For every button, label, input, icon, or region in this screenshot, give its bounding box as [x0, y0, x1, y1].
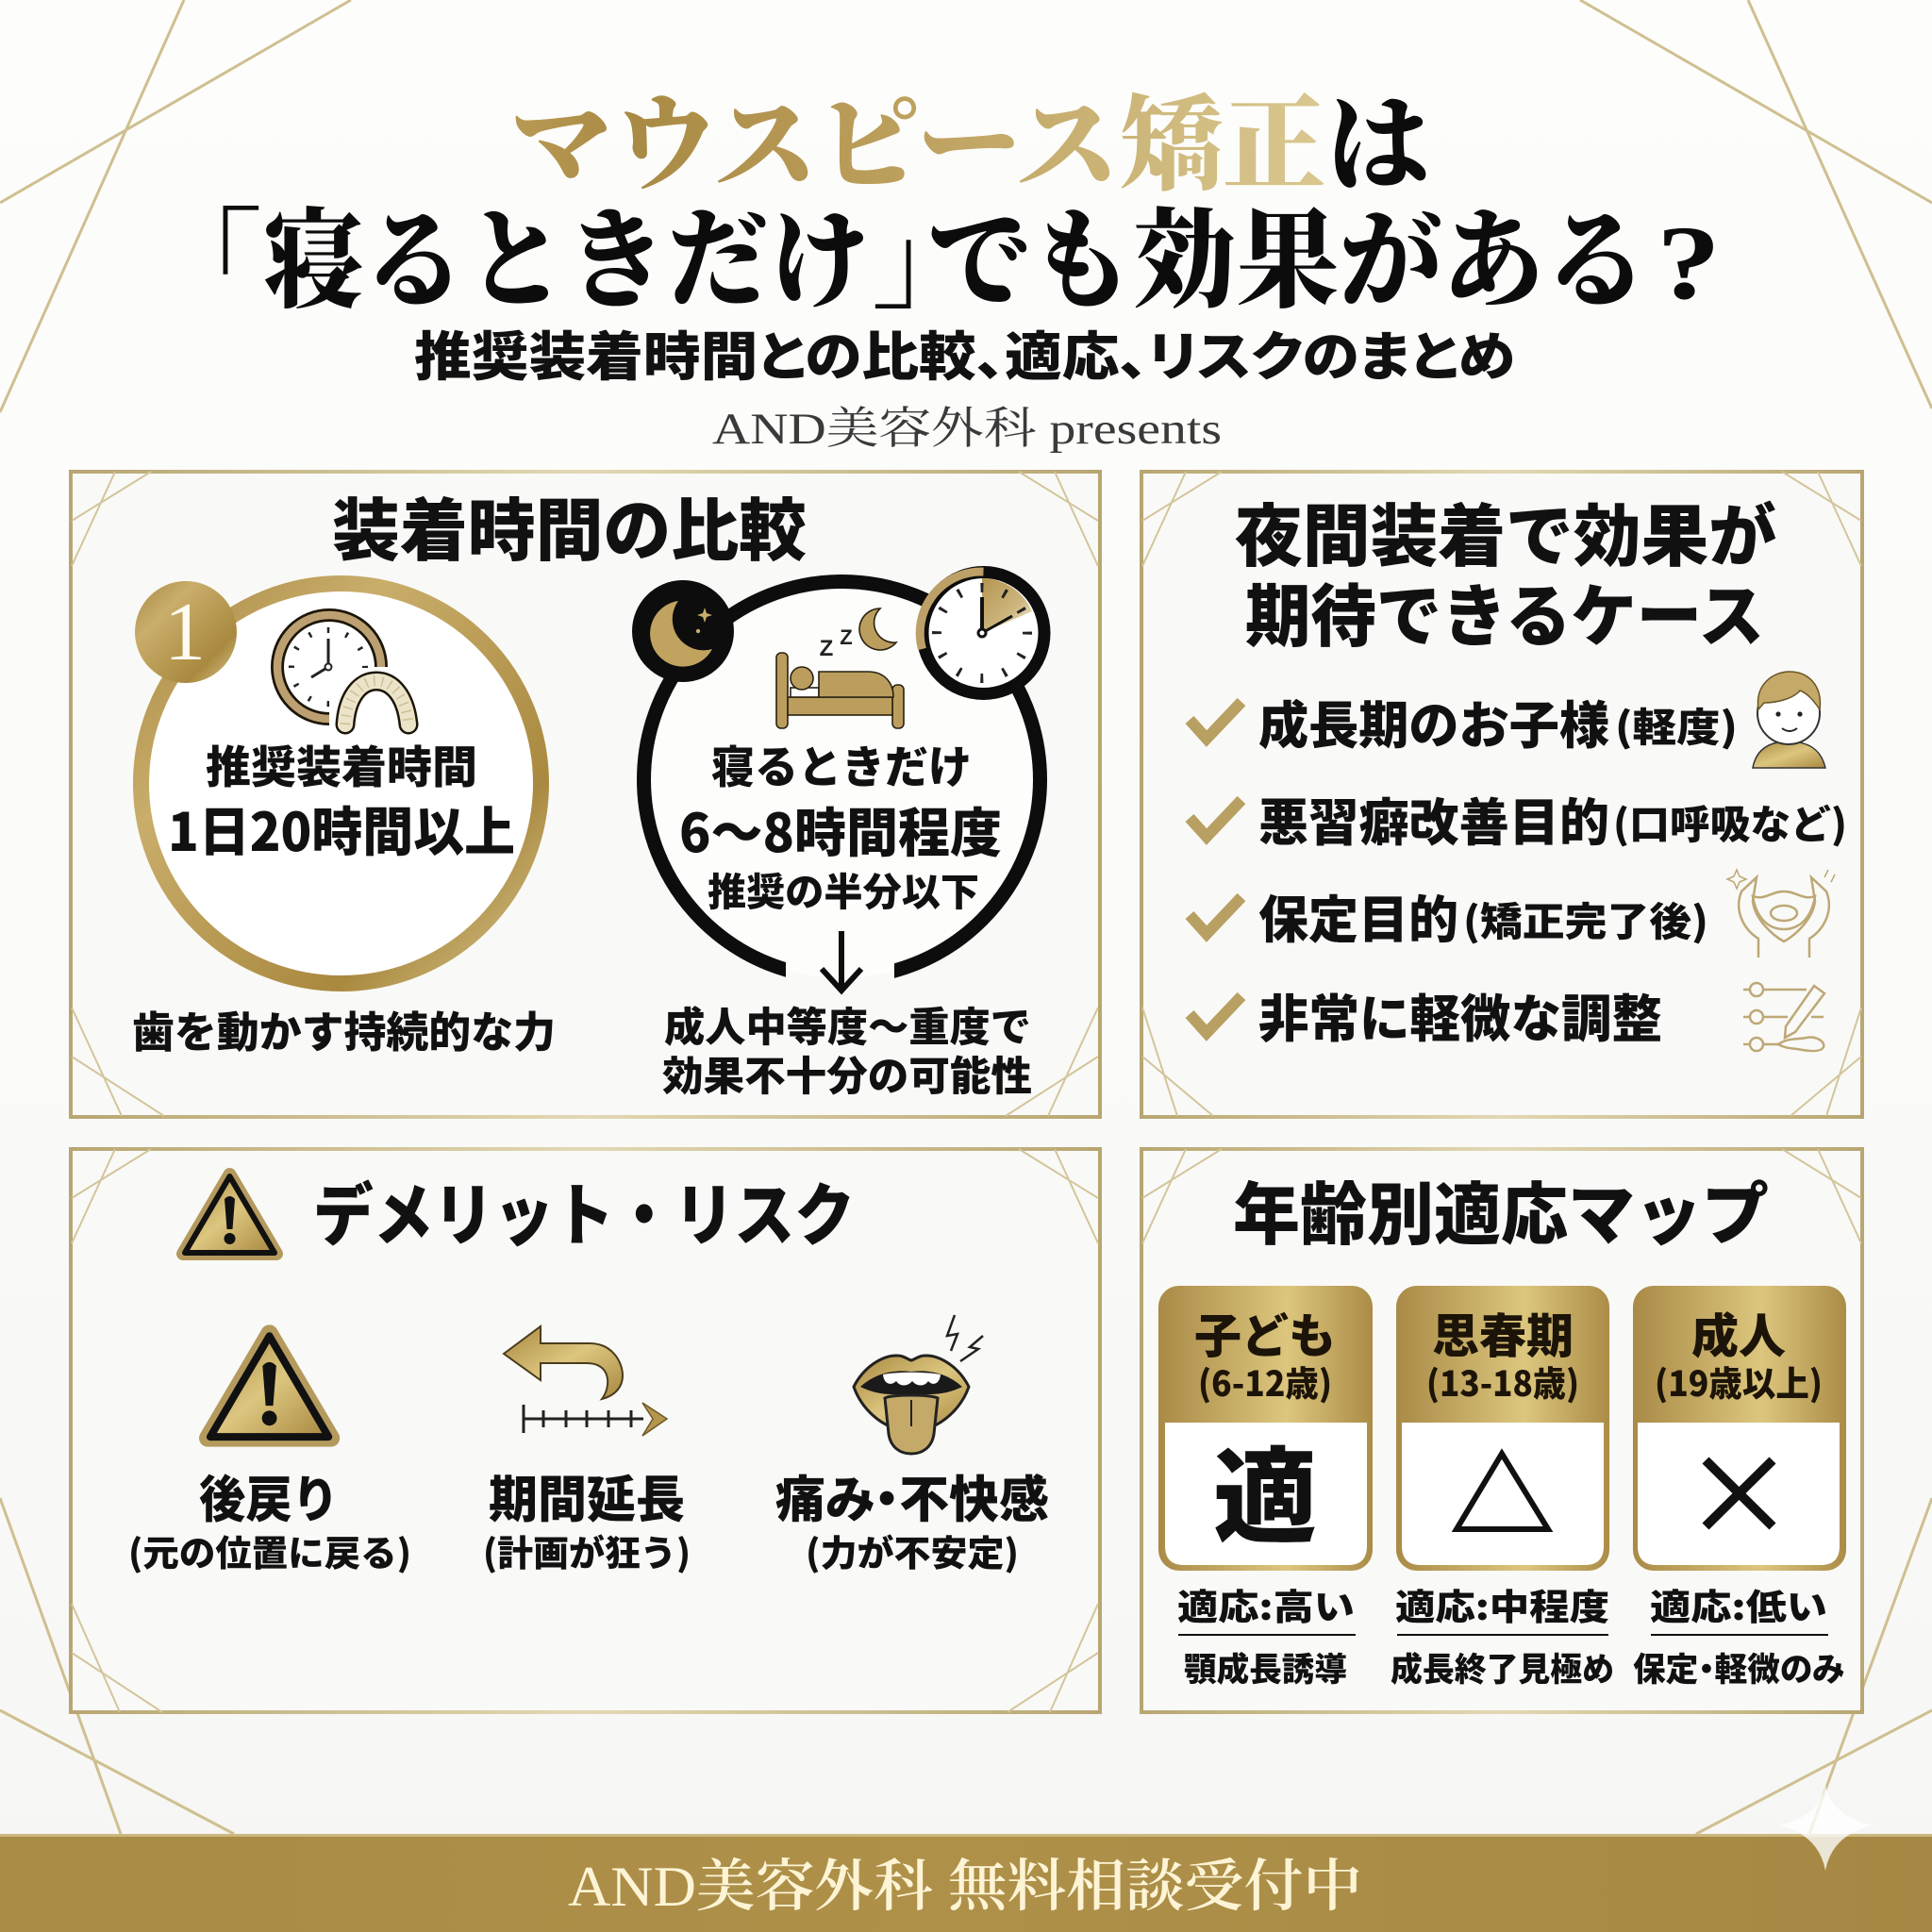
card: adolescents: [1391, 1286, 1614, 1691]
title line 2: ?: [1657, 205, 1721, 322]
number badge: [135, 581, 237, 683]
risk: longer period: (計画が狂う): [483, 1524, 691, 1576]
card: adolescents: 思春期: [1432, 1299, 1574, 1367]
icon: back arrow and timeline: [504, 1326, 667, 1436]
card: children: 適応:高い: [1177, 1578, 1355, 1630]
card: adults: [1633, 1286, 1846, 1691]
icon: clock with aligner: [277, 615, 408, 724]
card: adults: (19歳以上): [1655, 1356, 1823, 1407]
heading: 夜間装着で効果が: [1235, 481, 1776, 580]
icon: person sleeping in bed: Z: [840, 625, 853, 649]
item: minor adjustment: 非常に軽微な調整: [1258, 977, 1662, 1052]
panel: wear time comparison: [71, 472, 1100, 1117]
card: adults: 適応:低い: [1650, 1578, 1827, 1630]
risk: relapse: 後戻り: [199, 1460, 339, 1532]
black ring: sleep only: [632, 572, 1044, 977]
icon: moon badge: [632, 580, 734, 682]
icon: person sleeping in bed: [776, 608, 904, 728]
heading: 装着時間の比較: [332, 475, 807, 575]
heading: [1235, 481, 1776, 660]
item: growing children: 成長期のお子様: [1258, 684, 1609, 758]
panel: demerits and risks: [71, 1149, 1100, 1712]
item: habit improvement: [1190, 781, 1847, 856]
card: children: 顎成長誘導: [1184, 1643, 1347, 1691]
card: adolescents: 適応:中程度: [1395, 1578, 1609, 1630]
title line 2: 「: [154, 175, 261, 329]
panel: cases where night wear works: [1141, 472, 1862, 1117]
caption: possible insufficient effect: 成人中等度〜重度で: [664, 995, 1031, 1054]
risk: relapse: (元の位置に戻る): [128, 1524, 411, 1576]
caption: possible insufficient effect: [662, 995, 1032, 1103]
item: habit improvement: 悪習癖改善目的: [1258, 781, 1609, 856]
subtitle: 推奨装着時間との比較、適応、リスクのまとめ: [414, 315, 1515, 391]
card: adults: 成人: [1691, 1299, 1786, 1367]
item: growing children: (軽度): [1615, 696, 1738, 754]
footer text: AND美容外科 無料相談受付中: [568, 1841, 1362, 1923]
label: 推奨装着時間: [206, 731, 477, 796]
risk: pain and discomfort: [775, 1315, 1049, 1576]
title line 2: 」: [873, 175, 980, 329]
item: retention: (矯正完了後): [1463, 891, 1708, 948]
title block: [154, 62, 1721, 454]
icon: person sleeping in bed: Z: [820, 636, 833, 661]
footer banner: [0, 1834, 1932, 1932]
panel: age suitability map: [1141, 1149, 1862, 1712]
heading: デメリット・リスク: [313, 1160, 855, 1259]
caption: continuous force: 歯を動かす持続的な力: [132, 998, 556, 1059]
gold ring: recommended time: [135, 581, 541, 983]
icon: adjustment list: [1743, 983, 1824, 1051]
value: 6〜8時間程度: [679, 791, 1002, 868]
presenter line: AND美容外科 presents: [712, 405, 1222, 454]
heading: 期待できるケース: [1245, 561, 1764, 660]
item: habit improvement: (口呼吸など): [1613, 793, 1847, 851]
icon: mouth with tongue: [854, 1315, 983, 1454]
risk: pain and discomfort: (力が不安定): [806, 1524, 1019, 1576]
risk: longer period: [483, 1326, 691, 1576]
title line 1: マウスピース矯正は: [509, 62, 1430, 211]
icon: child: [1753, 672, 1825, 768]
title line 2: でも効果がある: [927, 175, 1648, 329]
label: 寝るときだけ: [711, 731, 972, 796]
card: adolescents: (13-18歳): [1426, 1356, 1579, 1407]
note: 推奨の半分以下: [708, 860, 979, 917]
icon: warning triangle: [208, 1334, 331, 1438]
icon: heading warning: [183, 1174, 276, 1254]
risk: longer period: 期間延長: [489, 1460, 685, 1532]
value: 1日20時間以上: [168, 791, 515, 867]
card: children: [1158, 1286, 1373, 1691]
risk: relapse: [128, 1334, 411, 1576]
item: growing children: [1190, 684, 1738, 758]
title line 2: [154, 175, 1721, 329]
card: children: (6-12歳): [1198, 1356, 1332, 1407]
card: children: 子ども: [1194, 1299, 1336, 1367]
card: adults: 保定・軽微のみ: [1633, 1643, 1844, 1691]
caption: possible insufficient effect: 効果不十分の可能性: [662, 1044, 1032, 1103]
card: adolescents: 成長終了見極め: [1391, 1643, 1614, 1691]
card: children: 適: [1213, 1413, 1317, 1564]
title line 2: 寝るときだけ: [263, 175, 869, 329]
arrow: down: [822, 931, 861, 991]
icon: sparkle: [1779, 1786, 1873, 1871]
icon: clock with gold wedge: [920, 572, 1044, 694]
item: retention: [1190, 878, 1708, 953]
number badge: 1: [164, 587, 206, 678]
icon: hands holding aligner: [1727, 870, 1835, 958]
risk: pain and discomfort: 痛み・不快感: [775, 1460, 1049, 1532]
heading: 年齢別適応マップ: [1233, 1159, 1769, 1258]
item: retention: 保定目的: [1258, 878, 1458, 953]
